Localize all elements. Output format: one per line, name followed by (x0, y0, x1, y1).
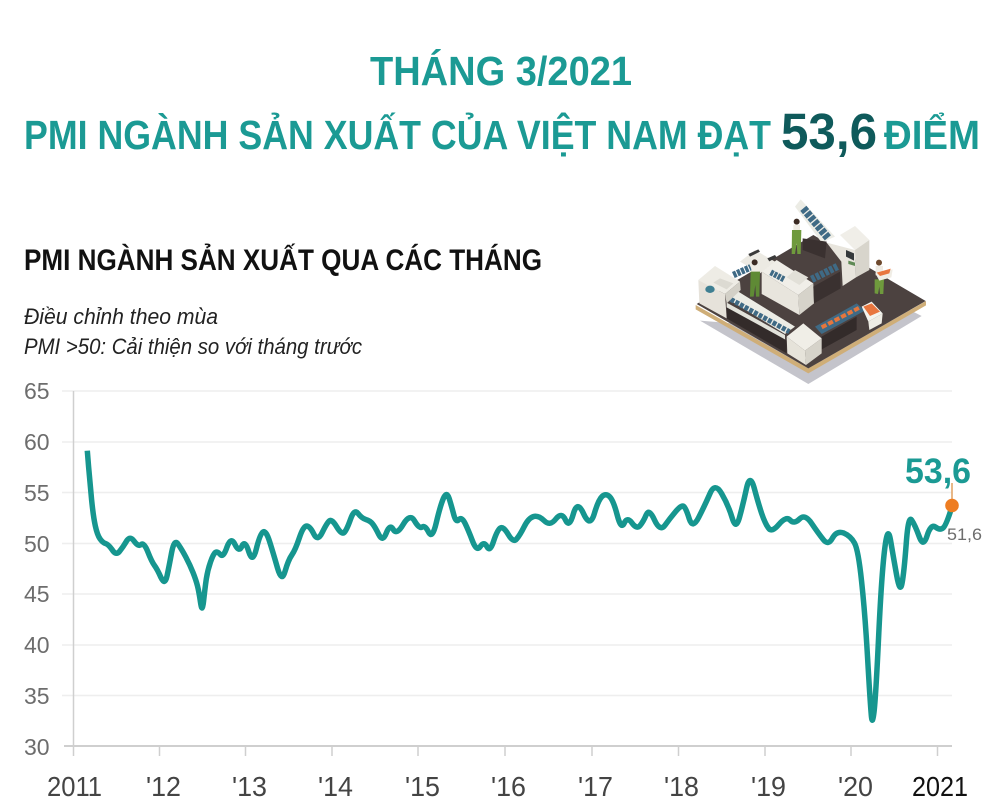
x axis labels: '18 (664, 771, 699, 802)
previous value label: 51,6 (947, 526, 982, 544)
grid lines (62, 391, 952, 696)
inclined conveyor (795, 199, 835, 243)
conveyor left (727, 292, 795, 334)
x axis labels: '20 (838, 771, 873, 802)
x axis labels: '15 (405, 771, 440, 802)
y axis labels: 35 (24, 683, 50, 709)
title (24, 48, 980, 160)
x axis labels (47, 771, 968, 802)
latest value marker (945, 499, 959, 512)
note: threshold: PMI >50: Cải thiện so với tháng trước (24, 334, 362, 359)
worker: left (750, 259, 760, 297)
PMI data line (87, 451, 952, 720)
right tall machine (840, 226, 869, 250)
title line 1: THÁNG 3/2021 (370, 48, 632, 94)
x axis labels: '13 (232, 771, 267, 802)
worker: right with box (875, 260, 893, 294)
y axis labels: 65 (24, 378, 50, 404)
title unit: ĐIỂM (884, 111, 980, 158)
line chart (24, 378, 982, 802)
left machine (698, 266, 740, 294)
worker: back (792, 219, 801, 254)
title line 2: PMI NGÀNH SẢN XUẤT CỦA VIỆT NAM ĐẠT (24, 112, 771, 158)
centre raised platform (777, 247, 840, 285)
latest value label: 53,6 (905, 452, 971, 491)
y axis labels: 60 (24, 429, 50, 455)
note: seasonally adjusted: Điều chỉnh theo mùa (24, 304, 218, 329)
y axis labels: 30 (24, 734, 50, 760)
section heading: PMI NGÀNH SẢN XUẤT QUA CÁC THÁNG (24, 243, 542, 277)
icon: isometric factory illustration (696, 199, 926, 384)
callout leader line (951, 483, 953, 505)
x axis labels: 2021 (912, 771, 968, 802)
y axis labels (24, 378, 50, 760)
y axis labels: 45 (24, 581, 50, 607)
x axis labels: '12 (146, 771, 181, 802)
front machine and orange conveyor (787, 323, 822, 351)
y axis labels: 55 (24, 480, 50, 506)
x axis labels: '19 (751, 771, 786, 802)
x axis labels: '14 (318, 771, 353, 802)
headline value: 53,6 (781, 103, 877, 160)
y axis labels: 40 (24, 632, 50, 658)
x axis labels: 2011 (47, 771, 102, 802)
y axis labels: 50 (24, 531, 50, 557)
subtitle notes (24, 304, 362, 359)
axes (64, 391, 952, 756)
centre machine (762, 260, 813, 295)
x axis labels: '17 (578, 771, 613, 802)
x axis labels: '16 (491, 771, 526, 802)
